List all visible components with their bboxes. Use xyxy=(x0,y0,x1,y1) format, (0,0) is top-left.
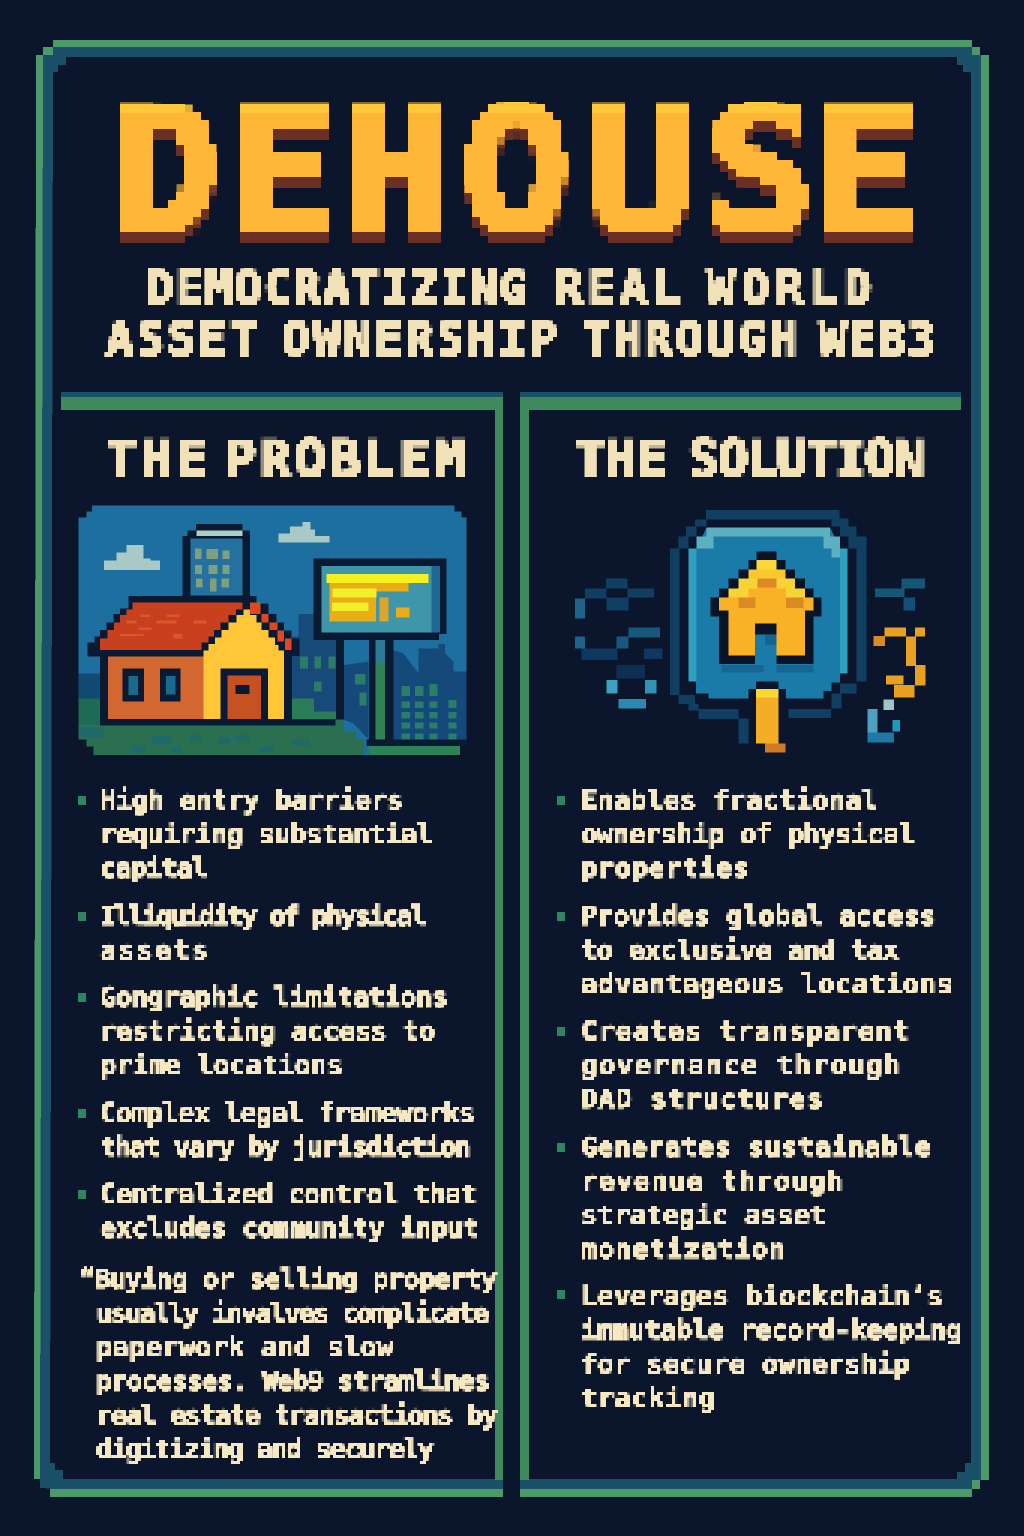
panel border: solution xyxy=(520,392,961,1480)
billboard xyxy=(336,639,344,719)
list: problem: High entry barriers xyxy=(100,785,403,816)
list: solution: Generates sustainable xyxy=(581,1132,931,1163)
title letters: DEHOUSE xyxy=(109,66,921,274)
grass xyxy=(79,719,364,755)
list: problem xyxy=(100,785,479,1244)
quote xyxy=(79,1264,498,1465)
right pixels xyxy=(902,578,925,588)
list: problem: that vary by jurisdiction xyxy=(100,1132,471,1163)
wall xyxy=(108,657,203,719)
tower xyxy=(183,524,250,597)
list: solution: Provides global access xyxy=(581,901,936,932)
list: solution: revenue through xyxy=(581,1166,843,1197)
subtitle: OWNERSHIP xyxy=(282,312,557,366)
heading: the problem xyxy=(106,430,465,490)
quote: processes. Web9 stramlines xyxy=(96,1366,490,1397)
heading: the solution xyxy=(575,430,925,490)
list: problem: Illiquidity of physical xyxy=(100,901,427,932)
outer ring xyxy=(670,510,867,743)
list: solution: strategic asset xyxy=(581,1200,826,1231)
list: problem: Complex legal frameworks xyxy=(100,1098,475,1129)
list: solution: tracking xyxy=(581,1383,715,1414)
panel: the solution xyxy=(520,392,962,1480)
list: solution: properties xyxy=(581,853,749,884)
list: solution: Leverages biockchain’s xyxy=(581,1281,943,1312)
list: solution: for secure ownership xyxy=(581,1349,910,1380)
subtitle: WORLD xyxy=(707,261,872,315)
background buildings xyxy=(292,614,337,720)
list: solution: Enables fractional xyxy=(581,785,878,816)
roof xyxy=(100,603,243,650)
subtitle xyxy=(106,261,935,366)
list: solution: governance through xyxy=(581,1050,900,1081)
list: solution: monetization xyxy=(581,1234,785,1265)
list: problem: assets xyxy=(100,935,208,966)
subtitle: THROUGH xyxy=(582,312,797,366)
quote: usually invalves complicate xyxy=(96,1298,489,1329)
ground strip xyxy=(367,739,467,746)
clouds xyxy=(104,522,329,570)
subtitle: WEB3 xyxy=(819,312,935,366)
sky xyxy=(79,505,467,755)
subtitle: REAL xyxy=(555,261,680,315)
heading: the solution: SOLUTION xyxy=(688,430,925,490)
bullets: problem xyxy=(78,796,86,1199)
list: problem: excludes community input xyxy=(100,1213,479,1244)
quote: paperwork and slow xyxy=(96,1332,394,1363)
list: solution: advantageous locations xyxy=(581,969,953,1000)
title xyxy=(120,102,913,243)
list: problem: Gongraphic limitations xyxy=(100,982,448,1013)
quote: digitizing and securely xyxy=(96,1434,434,1465)
icon: web3 house shield xyxy=(575,510,926,753)
left pixels xyxy=(606,578,628,588)
house glyph xyxy=(711,552,822,664)
heading: the problem: THE xyxy=(106,430,207,490)
pin xyxy=(756,689,779,743)
list: solution: ownership of physical xyxy=(581,819,915,850)
quote: real estate transactions by xyxy=(96,1400,498,1431)
illustration: house with billboard xyxy=(79,505,467,755)
list: solution: DAD structures xyxy=(581,1084,823,1115)
house xyxy=(87,596,335,726)
list: solution xyxy=(581,785,962,1414)
list: problem: requiring substantial xyxy=(100,819,433,850)
list: problem: capital xyxy=(100,853,208,884)
subtitle: ASSET xyxy=(106,312,257,366)
heading: the solution: THE xyxy=(575,430,667,490)
heading: the problem: PROBLEM xyxy=(225,430,465,490)
subtitle: DEMOCRATIZING xyxy=(146,261,527,315)
panel: the problem xyxy=(61,392,503,1480)
panel border: problem xyxy=(61,392,503,1480)
list: problem: restricting access to xyxy=(100,1016,435,1047)
bullets: solution xyxy=(557,796,565,1299)
list: solution: Creates transparent xyxy=(581,1016,909,1047)
list: problem: Centralized control that xyxy=(100,1179,477,1210)
quote: “Buying or selling property xyxy=(79,1264,497,1295)
list: solution: immutable record-keeping xyxy=(581,1315,962,1346)
windows and door xyxy=(123,668,144,702)
shield xyxy=(688,527,848,698)
list: problem: prime locations xyxy=(100,1050,343,1081)
list: solution: to exclusive and tax xyxy=(581,935,899,966)
title shadow: DEHOUSE xyxy=(109,77,921,285)
